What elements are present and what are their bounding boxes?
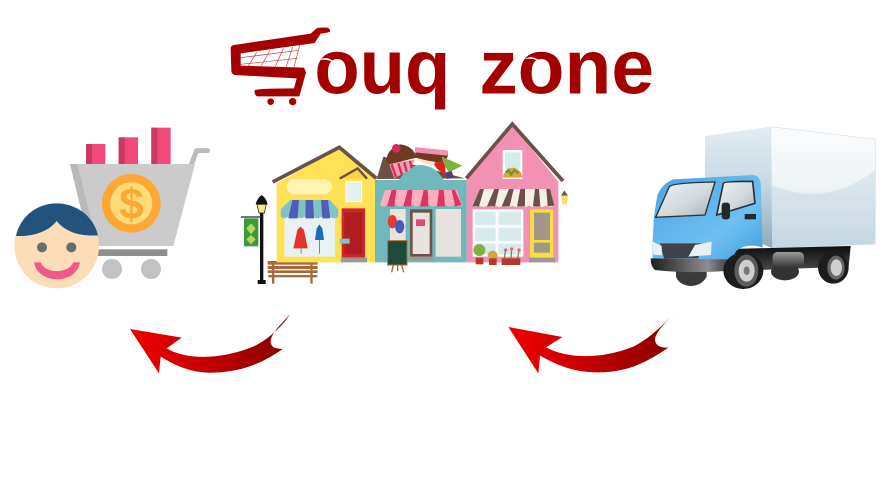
shop: teal sweet shop	[375, 144, 467, 272]
street lamp with banner	[241, 195, 268, 284]
truck cab	[651, 175, 763, 272]
wordmark: ouq: ouq	[314, 24, 450, 110]
icon: smiling face	[14, 203, 99, 288]
arrow: truck to shop	[508, 312, 675, 373]
illustration: delivery truck	[651, 127, 875, 289]
shop: pink home store	[466, 124, 568, 265]
icon: dollar coin	[102, 174, 161, 233]
hidden front wheel	[676, 270, 707, 286]
chassis and fuel tank	[730, 246, 851, 280]
rear wheel	[818, 252, 849, 284]
shop: yellow boutique	[273, 147, 376, 262]
logo: Souq zone	[231, 24, 654, 110]
cart body	[70, 151, 208, 279]
icon: dollar coin: $	[119, 180, 144, 229]
icon: shopping cart forming the letter S	[231, 27, 330, 105]
icon: green fan treat	[442, 157, 462, 179]
chart bars in cart	[86, 128, 171, 164]
illustration: shopper and cart	[14, 128, 208, 288]
icon: layer cake	[415, 147, 448, 174]
front wheel	[723, 252, 763, 289]
illustration: row of shops	[241, 124, 568, 284]
bench	[268, 261, 318, 284]
icon: cupcake	[387, 144, 417, 178]
chalkboard sign	[388, 241, 407, 272]
cargo box	[705, 127, 875, 248]
arrow: shop to shopper	[130, 314, 290, 373]
wordmark: zone: zone	[479, 24, 654, 110]
